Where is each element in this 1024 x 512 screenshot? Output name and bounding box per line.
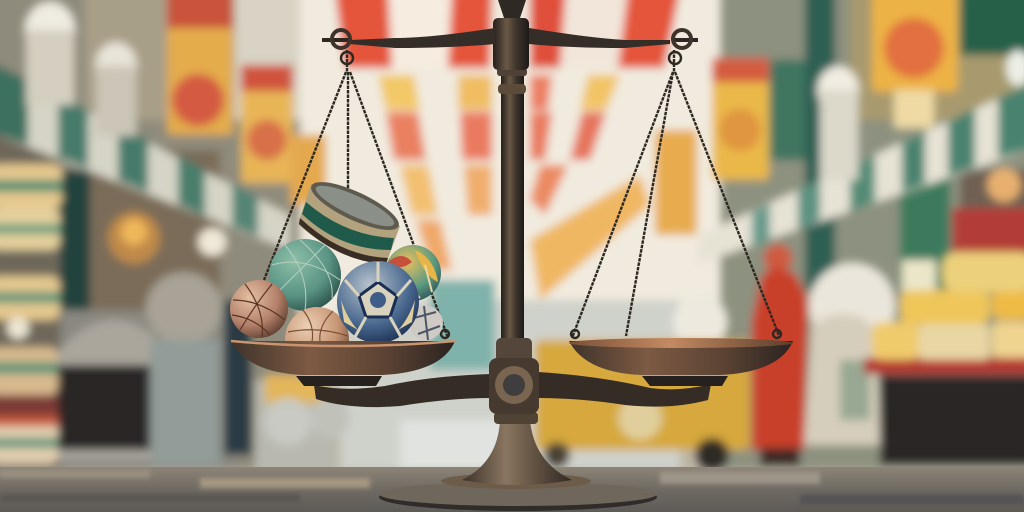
left pan underside [296, 376, 382, 386]
background: right awning [695, 82, 1024, 265]
top beam [322, 28, 698, 48]
right pan [569, 338, 793, 386]
background: left hanging banners [167, 0, 326, 205]
ball: yellow green multicolour [385, 245, 441, 301]
background: striped bunting [335, 0, 680, 370]
chains [264, 50, 781, 338]
lower curved arms [314, 358, 711, 414]
background: right banners [655, 0, 958, 235]
balls on left pan [230, 173, 455, 375]
background: left domes and lanterns [25, 2, 350, 470]
ball: brown left [230, 280, 288, 338]
ball: far right white [409, 306, 443, 340]
scale base [379, 412, 657, 511]
ball: tan front [285, 307, 349, 371]
object: striped cylinder [298, 173, 404, 264]
balance scale [264, 0, 793, 511]
ball: blue patterned [337, 261, 419, 343]
background: right figures and stall [400, 50, 1024, 472]
scale column [493, 0, 532, 390]
table top [0, 467, 1024, 512]
ball: green net [269, 239, 341, 311]
background: left awning [0, 62, 290, 250]
background: left stack of goods [0, 164, 62, 464]
left pan [231, 341, 455, 375]
